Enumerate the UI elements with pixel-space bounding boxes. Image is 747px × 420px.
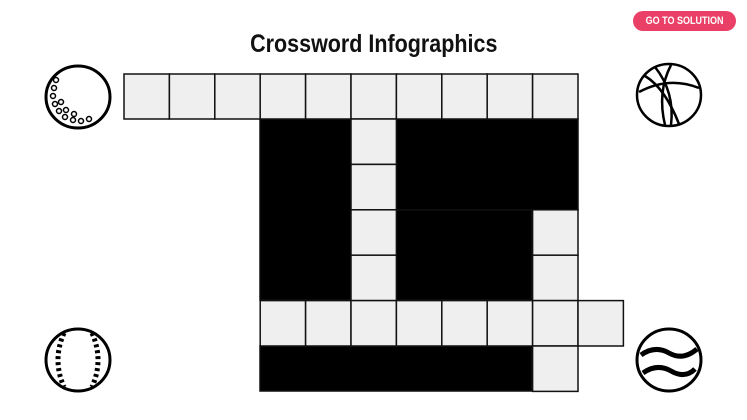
icon: tennis ball [636,328,702,392]
title: Crossword Infographics [250,30,497,58]
icon: golf ball [44,64,112,130]
icon: baseball [44,328,112,392]
white cells [124,74,623,391]
button: go to solution: GO TO SOLUTION [645,15,723,27]
button: go to solution [633,11,736,31]
black blocks [260,119,578,391]
icon: basketball [636,62,702,128]
